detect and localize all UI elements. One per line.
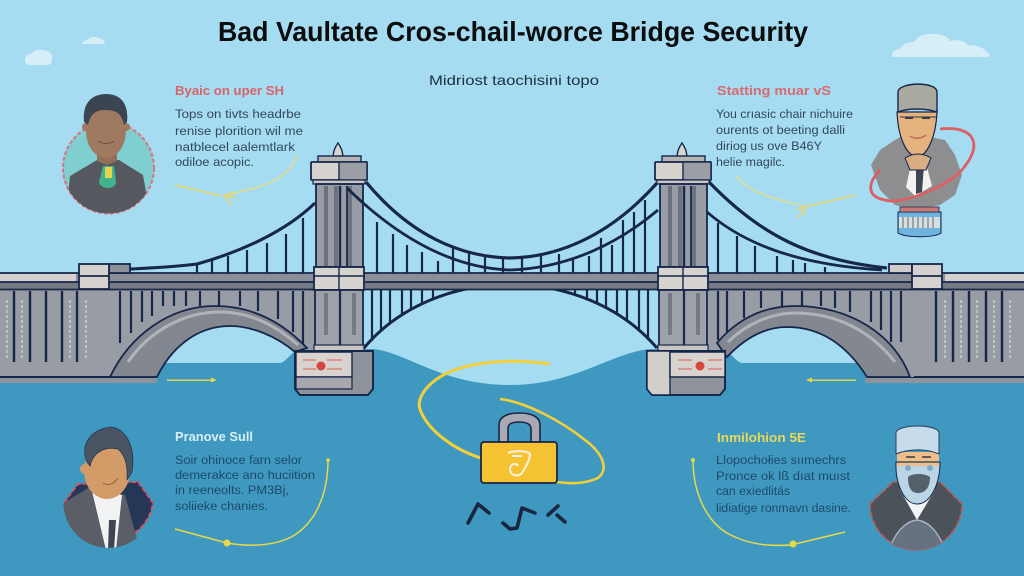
bridge xyxy=(0,143,1024,395)
panel: bottom right xyxy=(691,426,962,552)
body text: ourents ot beeting dalli xyxy=(716,123,845,137)
panel: top left xyxy=(63,84,303,215)
body text xyxy=(175,453,315,513)
subtitle: Midriost taochisini topo xyxy=(429,72,599,88)
arrow xyxy=(736,175,856,218)
portrait: top left xyxy=(63,94,154,215)
panel: top right xyxy=(716,83,974,237)
arrow: right water xyxy=(806,378,856,382)
body text: can exiedlitás xyxy=(716,484,790,498)
body text: helie magilc. xyxy=(716,155,785,169)
arrow xyxy=(175,155,297,205)
body text: demerakce ano huciition xyxy=(175,468,315,482)
under-deck hangers and centre arch xyxy=(364,284,657,348)
portrait: top right xyxy=(871,84,974,237)
right pier xyxy=(647,351,725,395)
body text xyxy=(716,453,851,515)
squiggle marks xyxy=(468,504,565,529)
body text: Llopochołies sıımechrs xyxy=(716,453,846,467)
left arch spandrel xyxy=(110,289,316,377)
portrait: bottom left xyxy=(60,427,153,550)
portrait: bottom right xyxy=(870,426,962,552)
body text: Soir ohinoce farn selor xyxy=(175,453,302,467)
panel: bottom left xyxy=(60,427,330,550)
body text: lidiatige ronmavn dasine. xyxy=(716,501,851,515)
arrow xyxy=(175,458,330,546)
lock body xyxy=(481,442,557,483)
heading: Statting muar vS xyxy=(717,83,831,98)
body text: odiloe acopic. xyxy=(175,155,254,169)
deck xyxy=(0,273,1024,290)
body text: in reeneolts. PM3Bj, xyxy=(175,483,289,497)
body text: Tops on tivts headrbe xyxy=(175,107,301,121)
body text: Pronce ok lß dıat muıst xyxy=(716,469,851,483)
heading: Byaic on uper SH xyxy=(175,84,284,98)
body text: natblecel aalemtlark xyxy=(175,140,296,154)
arrow xyxy=(691,458,845,548)
side cable right xyxy=(707,182,887,273)
main cables xyxy=(347,182,658,273)
yellow swoosh xyxy=(419,361,604,483)
right arch spandrel xyxy=(708,289,914,377)
right tower xyxy=(655,143,711,351)
clouds xyxy=(25,34,990,65)
arrow: left water xyxy=(167,378,217,382)
body text xyxy=(716,107,853,169)
left deck end block xyxy=(79,264,130,289)
body text: You crıasic chair nichuire xyxy=(716,107,853,121)
water with wave xyxy=(0,349,1024,576)
right deck end block xyxy=(889,264,942,289)
shackle xyxy=(499,413,540,442)
body text: soliieke chanies. xyxy=(175,499,268,513)
side cable left xyxy=(130,203,315,273)
left pier xyxy=(295,351,373,395)
left tower xyxy=(311,143,367,351)
heading: Pranove Sull xyxy=(175,429,253,444)
right abutment xyxy=(865,289,1024,383)
lock glyph xyxy=(508,451,530,475)
title: Bad Vaultate Cros-chail-worce Bridge Security xyxy=(218,16,808,47)
heading: Inmilohion 5E xyxy=(717,430,806,445)
body text: diriog us ove B46Y xyxy=(716,139,822,153)
body text xyxy=(175,107,303,169)
body text: renise plorition wil me xyxy=(175,124,303,138)
padlock xyxy=(419,361,604,483)
left abutment xyxy=(0,289,157,383)
